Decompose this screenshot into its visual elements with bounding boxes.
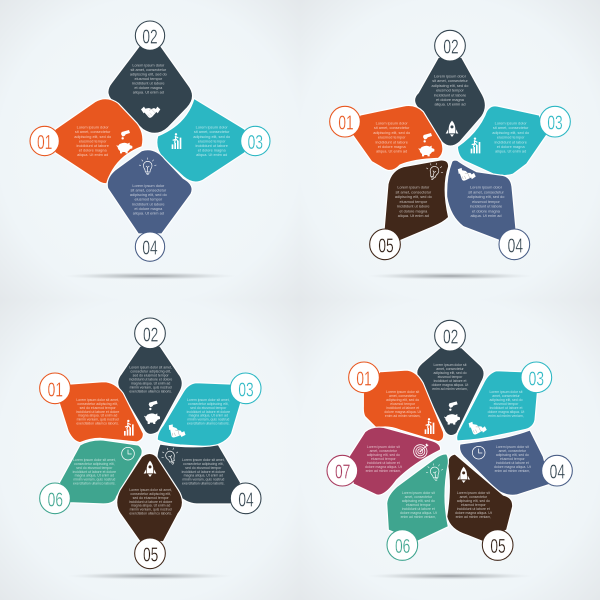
step 04 <box>447 160 530 260</box>
step 03 <box>157 98 270 182</box>
step 05 text: Lorem ipsum dolor sit <box>457 491 490 495</box>
step 01 text: Lorem ipsum dolor sit <box>386 390 419 394</box>
step 02 text: eiusmod tempor <box>134 77 163 81</box>
step 06 text: amet, consectetur <box>405 495 433 499</box>
icon: light bulb <box>139 158 156 175</box>
step 05 badge: 05 <box>490 535 506 558</box>
step 07 text: adipiscing elit, sed do <box>367 453 400 457</box>
step 05 text: incididunt ut labore <box>397 205 430 209</box>
step 05 text: incididunt ut labore et dolore <box>129 500 172 504</box>
step 02 text: et dolore magna <box>436 98 465 102</box>
step 07 text: eiusmod tempor <box>371 457 397 461</box>
step 04 badge: 04 <box>508 234 523 257</box>
step 01 <box>30 99 143 184</box>
step 04 <box>157 444 261 514</box>
step 05 text: minim veniam, quis nostrud <box>130 508 172 512</box>
step 02 text: magna aliqua. Ut enim ad <box>131 381 170 385</box>
step 03 text: et dolore magna <box>497 145 525 149</box>
step 01 text: incididunt ut labore et <box>386 406 419 410</box>
step 04 text: sit amet, consectetur <box>131 189 167 193</box>
step 04 text: enim ad minim veniam, <box>495 469 530 473</box>
step 04 text: sit amet, consectetur <box>468 190 505 194</box>
icon: handshake <box>165 423 187 442</box>
step 04 text: eiusmod tempor <box>500 457 526 461</box>
step 02 text: sit amet, consectetur <box>131 68 167 72</box>
step 03 text: sit amet, consectetur <box>194 130 230 134</box>
step 06 text: dolore magna aliqua. Ut <box>400 511 437 515</box>
step 01 <box>330 105 443 171</box>
step 02 text: sed do eiusmod tempor <box>133 374 170 378</box>
step 01 text: amet, consectetur <box>389 394 417 398</box>
step 01 text: exercitation ullamco laboris. <box>76 422 119 426</box>
icon: piggy bank <box>419 133 434 156</box>
step 02 text: adipiscing elit, sed do <box>432 84 468 88</box>
step 05 text: aliqua. Ut enim ad <box>398 214 429 218</box>
step 04 text: eiusmod tempor <box>134 198 163 202</box>
icon: runner on chart <box>425 418 434 434</box>
step 02 <box>118 318 182 434</box>
step 01 text: eiusmod tempor <box>390 402 416 406</box>
step 03 text: minim veniam, quis nostrud <box>187 418 229 422</box>
step 02 <box>414 30 485 146</box>
step 03 text: enim ad minim veniam, <box>488 414 524 418</box>
step 03 <box>157 373 261 447</box>
step 04 <box>107 150 192 261</box>
step 03 text: Lorem ipsum dolor sit <box>489 390 523 394</box>
step 05 text: eiusmod tempor <box>399 200 428 204</box>
icon: rocket <box>144 461 156 477</box>
step 04 text: incididunt ut labore <box>470 205 502 209</box>
step 03 text: Lorem ipsum dolor <box>196 126 228 130</box>
step 05 text: enim ad minim veniam, <box>456 515 491 519</box>
icon: clock <box>122 447 134 460</box>
step 02 text: dolore magna aliqua. Ut <box>432 383 468 387</box>
step 05 text: adipiscing elit, sed do <box>457 499 490 503</box>
step 01 badge: 01 <box>356 367 372 390</box>
step 03 text: exercitation ullamco laboris. <box>187 422 230 426</box>
step 03 badge: 03 <box>529 367 544 390</box>
icon: target <box>414 443 429 458</box>
step 04 <box>459 430 572 495</box>
step 03 text: consectetur adipiscing elit, <box>188 402 229 406</box>
step 03 text: Lorem ipsum dolor <box>495 121 527 125</box>
step 02 <box>108 21 193 133</box>
step 04 text: sed do eiusmod tempor <box>185 466 222 470</box>
step 06 text: incididunt ut labore et <box>402 507 435 511</box>
step 03 text: adipiscing elit, sed do <box>489 398 523 402</box>
step 05 text: dolore magna aliqua. Ut <box>455 511 492 515</box>
step 01 text: aliqua. Ut enim ad <box>376 150 407 154</box>
step 03 text: eiusmod tempor <box>494 402 519 406</box>
step 06 text: eiusmod tempor <box>406 503 432 507</box>
step 04 text: Lorem ipsum dolor sit amet, <box>182 458 225 462</box>
step 02 badge: 02 <box>443 326 458 349</box>
step 03 text: incididunt ut labore <box>195 144 228 148</box>
step 04 text: eiusmod tempor <box>472 200 501 204</box>
step 02 text: adipiscing elit, sed do <box>433 371 467 375</box>
step 03 badge: 03 <box>547 112 563 135</box>
icon: light bulb <box>424 161 445 182</box>
ground shadow <box>367 272 533 280</box>
ground shadow <box>67 572 233 580</box>
step 05 text: et dolore magna <box>399 209 428 213</box>
step 02 text: aliqua. Ut enim ad <box>133 91 164 95</box>
step 01 text: minim veniam, quis nostrud <box>77 418 119 422</box>
step 02 text: enim ad minim veniam, <box>432 387 468 391</box>
step 02 badge: 02 <box>142 26 158 49</box>
step 02 text: incididunt ut labore et <box>434 379 466 383</box>
step 02 text: incididunt ut labore <box>132 82 165 86</box>
step 05 text: adipiscing elit, sed do <box>395 195 432 199</box>
step 03 text: sed do eiusmod tempor <box>190 406 227 410</box>
step 04 text: Lorem ipsum dolor sit <box>496 445 529 449</box>
step 02 text: adipiscing elit, sed do <box>130 72 167 76</box>
step 01 text: et dolore magna <box>79 148 107 152</box>
step 03 text: incididunt ut labore <box>494 140 527 144</box>
step 06 text: minim veniam, quis nostrud <box>73 478 115 482</box>
step 06 badge: 06 <box>395 535 410 558</box>
step 07 text: enim ad minim veniam, <box>366 469 401 473</box>
icon: clock <box>472 446 485 459</box>
step 04 text: aliqua. Ut enim ad <box>470 214 502 218</box>
step 05 text: amet, consectetur <box>460 495 488 499</box>
step 04 text: adipiscing elit, sed do <box>468 195 504 199</box>
step 03 text: magna aliqua. Ut enim ad <box>189 414 228 418</box>
icon: light bulb <box>159 445 181 467</box>
step 03 text: eiusmod tempor <box>198 139 226 143</box>
step 04 text: et dolore magna <box>134 207 163 211</box>
step 03 <box>457 362 552 441</box>
step 01 text: eiusmod tempor <box>79 139 107 143</box>
step 03 text: adipiscing elit, sed do <box>492 131 529 135</box>
step 02 text: Lorem ipsum dolor sit <box>433 363 467 367</box>
panel: five-step diagram <box>300 0 600 300</box>
step 01 badge: 01 <box>48 378 63 401</box>
step 06 badge: 06 <box>48 488 63 511</box>
step 03 text: amet, consectetur <box>492 394 521 398</box>
step 01 text: adipiscing elit, sed do <box>373 131 410 135</box>
step 02 badge: 02 <box>443 36 459 59</box>
step 02 text: incididunt ut labore <box>434 93 466 97</box>
step 04 text: amet, consectetur <box>499 449 527 453</box>
step 05 text: incididunt ut labore et <box>457 507 490 511</box>
step 05 text: eiusmod tempor <box>461 503 487 507</box>
step 03 text: incididunt ut labore et <box>490 406 522 410</box>
step 02 text: Lorem ipsum dolor <box>434 74 467 78</box>
step 01 badge: 01 <box>37 131 52 154</box>
step 03 text: aliqua. Ut enim ad <box>196 153 227 157</box>
step 01 <box>40 373 143 443</box>
icon: handshake <box>455 167 477 184</box>
step 02 text: incididunt ut labore et dolore <box>129 377 172 381</box>
step 03 text: incididunt ut labore et dolore <box>187 410 230 414</box>
step 05 text: Lorem ipsum dolor <box>397 186 430 190</box>
step 03 text: adipiscing elit, sed do <box>193 135 230 139</box>
step 04 text: Lorem ipsum dolor <box>470 186 503 190</box>
step 04 text: adipiscing elit, sed do <box>130 193 167 197</box>
step 03 text: eiusmod tempor <box>497 136 525 140</box>
step 06 text: Lorem ipsum dolor sit amet, <box>73 458 116 462</box>
step 02 text: consectetur adipiscing elit, <box>130 370 171 374</box>
ground shadow <box>367 572 533 580</box>
step 02 text: Lorem ipsum dolor sit amet, <box>129 366 172 370</box>
step 03 text: Lorem ipsum dolor sit amet, <box>187 398 230 402</box>
step 01 text: magna aliqua. Ut enim ad <box>78 414 117 418</box>
step 02 text: eiusmod tempor <box>436 89 465 93</box>
step 06 text: exercitation ullamco laboris. <box>73 482 116 486</box>
step 03 text: sit amet, consectetur <box>493 126 529 130</box>
step 04 text: adipiscing elit, sed do <box>496 453 529 457</box>
step 01 text: dolore magna aliqua. Ut <box>384 410 421 414</box>
ground shadow <box>63 272 237 280</box>
step 02 badge: 02 <box>143 323 158 346</box>
step 06 text: magna aliqua. Ut enim ad <box>75 474 114 478</box>
step 04 text: incididunt ut labore <box>132 202 165 206</box>
step 01 text: adipiscing elit, sed do <box>74 135 111 139</box>
icon: light bulb <box>425 462 445 482</box>
panel: seven-step diagram <box>300 300 600 600</box>
step 02 text: minim veniam, quis nostrud <box>130 385 172 389</box>
step 05 text: consectetur adipiscing elit, <box>130 492 171 496</box>
step 05 text: sit amet, consectetur <box>396 190 432 194</box>
step 01 text: eiusmod tempor <box>378 136 406 140</box>
step 04 text: consectetur adipiscing elit, <box>183 462 224 466</box>
step 02 text: exercitation ullamco laboris. <box>129 389 172 393</box>
step 06 text: incididunt ut labore et dolore <box>73 470 116 474</box>
icon: runner on chart <box>471 137 480 153</box>
icon: handshake <box>141 107 160 118</box>
step 06 text: Lorem ipsum dolor sit <box>402 491 435 495</box>
step 02 text: et dolore magna <box>134 86 163 90</box>
step 03 badge: 03 <box>248 131 263 154</box>
step 04 badge: 04 <box>238 488 254 511</box>
step 01 text: sed do eiusmod tempor <box>80 406 117 410</box>
step 06 text: sed do eiusmod tempor <box>76 466 113 470</box>
step 04 text: et dolore magna <box>472 209 501 213</box>
step 04 badge: 04 <box>550 461 565 484</box>
step 04 text: exercitation ullamco laboris. <box>182 482 225 486</box>
step 05 badge: 05 <box>143 543 158 566</box>
panel: four-step diagram <box>0 0 300 300</box>
step 05 <box>370 160 449 260</box>
step 01 text: Lorem ipsum dolor sit amet, <box>76 398 119 402</box>
step 07 badge: 07 <box>335 461 350 484</box>
icon: piggy bank <box>444 401 460 425</box>
step 01 text: Lorem ipsum dolor <box>77 126 109 130</box>
step 03 text: aliqua. Ut enim ad <box>495 150 526 154</box>
step 04 text: Lorem ipsum dolor <box>132 184 165 188</box>
step 04 text: aliqua. Ut enim ad <box>133 211 164 215</box>
step 01 text: aliqua. Ut enim ad <box>77 153 108 157</box>
icon: runner on chart <box>124 420 134 436</box>
step 04 text: incididunt ut labore et dolore <box>182 470 225 474</box>
step 02 text: sit amet, consectetur <box>432 79 469 83</box>
step 07 text: amet, consectetur <box>370 449 398 453</box>
step 04 text: dolore magna aliqua. Ut <box>494 465 531 469</box>
step 06 <box>387 454 448 560</box>
step 01 text: et dolore magna <box>378 145 406 149</box>
step 05 <box>117 453 182 569</box>
icon: rocket <box>446 121 458 137</box>
step 07 <box>327 427 441 495</box>
step 04 text: incididunt ut labore et <box>496 461 529 465</box>
step 04 badge: 04 <box>142 237 158 260</box>
step 05 text: Lorem ipsum dolor sit amet, <box>129 488 172 492</box>
step 05 badge: 05 <box>378 234 394 257</box>
step 01 text: incididunt ut labore <box>375 140 408 144</box>
step 03 text: dolore magna aliqua. Ut <box>488 410 524 414</box>
step 01 text: sit amet, consectetur <box>374 126 410 130</box>
step 06 <box>40 440 142 514</box>
step 07 text: Lorem ipsum dolor sit <box>367 445 400 449</box>
step 02 text: amet, consectetur <box>436 367 465 371</box>
icon: piggy bank <box>117 130 132 153</box>
step 02 text: aliqua. Ut enim ad <box>434 103 466 107</box>
step 02 <box>417 320 484 436</box>
step 01 text: adipiscing elit, sed do <box>386 398 419 402</box>
step 07 text: dolore magna aliqua. Ut <box>365 465 402 469</box>
step 03 <box>457 106 570 176</box>
step 01 text: sit amet, consectetur <box>75 130 111 134</box>
step 01 text: consectetur adipiscing elit, <box>77 402 118 406</box>
step 03 text: et dolore magna <box>198 148 226 152</box>
step 01 text: enim ad minim veniam, <box>385 414 420 418</box>
icon: runner on chart <box>172 133 181 149</box>
panel: six-step diagram <box>0 300 300 600</box>
step 06 text: consectetur adipiscing elit, <box>74 462 115 466</box>
step 04 text: minim veniam, quis nostrud <box>182 478 224 482</box>
step 01 text: incididunt ut labore <box>76 144 109 148</box>
step 02 text: Lorem ipsum dolor <box>132 63 165 67</box>
step 05 text: magna aliqua. Ut enim ad <box>131 504 170 508</box>
step 01 badge: 01 <box>338 112 354 135</box>
icon: rocket <box>457 467 470 483</box>
step 01 text: Lorem ipsum dolor <box>376 121 408 125</box>
step 05 text: exercitation ullamco laboris. <box>129 512 172 516</box>
icon: piggy bank <box>144 401 160 424</box>
step 04 text: magna aliqua. Ut enim ad <box>184 474 223 478</box>
icon: handshake <box>466 421 488 438</box>
step 02 text: eiusmod tempor <box>438 375 463 379</box>
step 06 text: adipiscing elit, sed do <box>402 499 435 503</box>
step 05 <box>447 454 513 560</box>
step 01 text: incididunt ut labore et dolore <box>76 410 119 414</box>
step 03 badge: 03 <box>238 378 254 401</box>
step 05 text: sed do eiusmod tempor <box>133 496 170 500</box>
step 06 text: enim ad minim veniam, <box>401 515 436 519</box>
step 01 <box>349 362 444 442</box>
step 07 text: incididunt ut labore et <box>367 461 400 465</box>
